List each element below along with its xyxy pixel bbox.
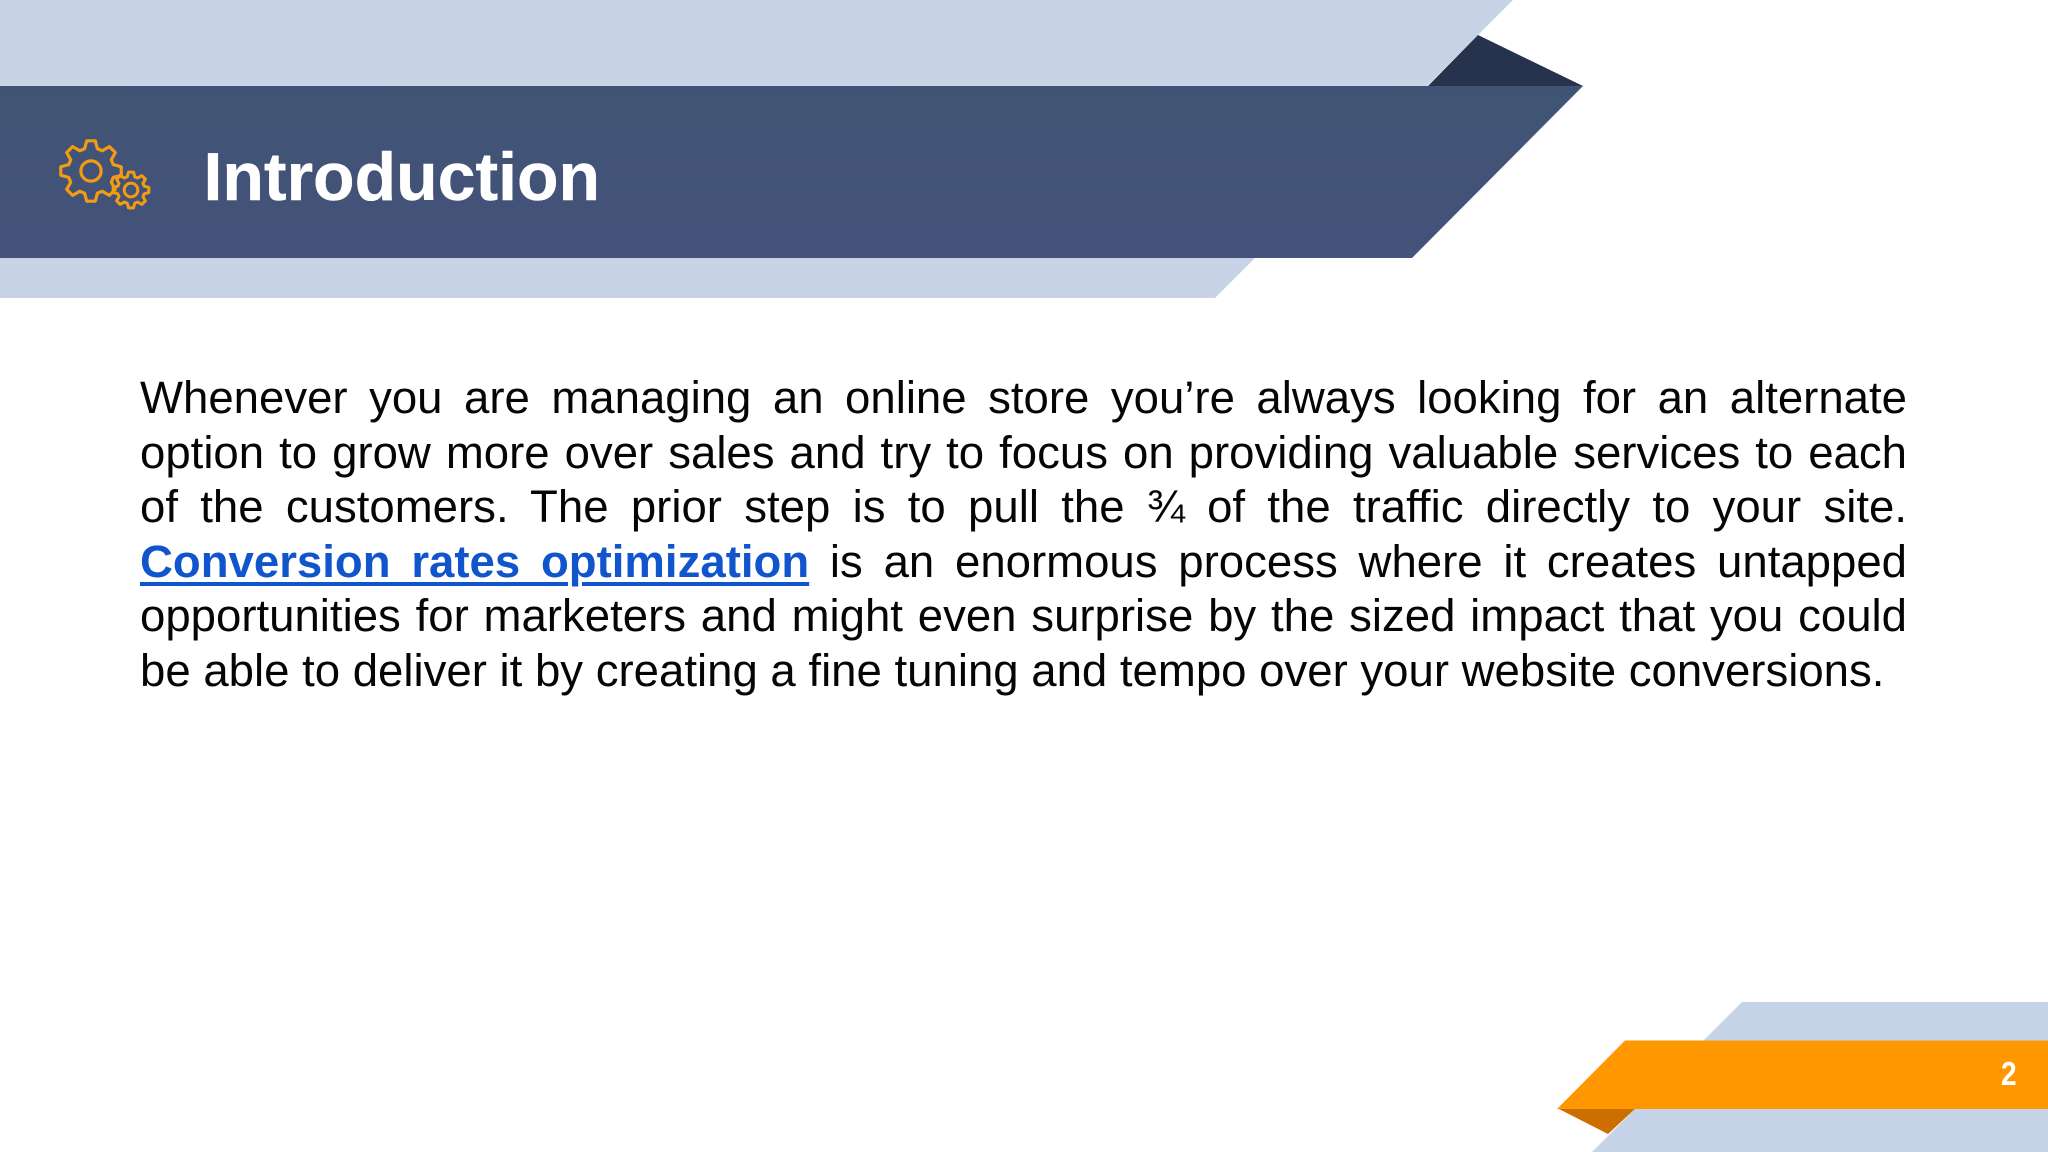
light footer band bbox=[1592, 1002, 2048, 1152]
dark fold triangle bbox=[1428, 35, 1583, 86]
body paragraph: Conversion rates optimization is an enormous process where it creates untapped bbox=[140, 536, 1907, 587]
body paragraph: Whenever you are managing an online store you’re always looking for an alternate bbox=[140, 372, 1907, 423]
title: Introduction bbox=[204, 139, 600, 215]
page number: 2 bbox=[2001, 1055, 2017, 1092]
body paragraph: of the customers. The prior step is to pull the ¾ of the traffic directly to your site. bbox=[140, 481, 1907, 532]
body paragraph bbox=[140, 372, 1907, 696]
light header band bbox=[0, 0, 1513, 298]
body paragraph: be able to deliver it by creating a fine tuning and tempo over your website conversions. bbox=[140, 645, 1884, 696]
dark orange fold triangle bbox=[1557, 1108, 1636, 1134]
dark header ribbon bbox=[0, 86, 1583, 258]
icon: gears bbox=[61, 141, 149, 208]
orange footer ribbon bbox=[1557, 1040, 2048, 1109]
body paragraph: option to grow more over sales and try to focus on providing valuable services to each bbox=[140, 427, 1907, 478]
body paragraph: opportunities for marketers and might even surprise by the sized impact that you could bbox=[140, 590, 1907, 641]
